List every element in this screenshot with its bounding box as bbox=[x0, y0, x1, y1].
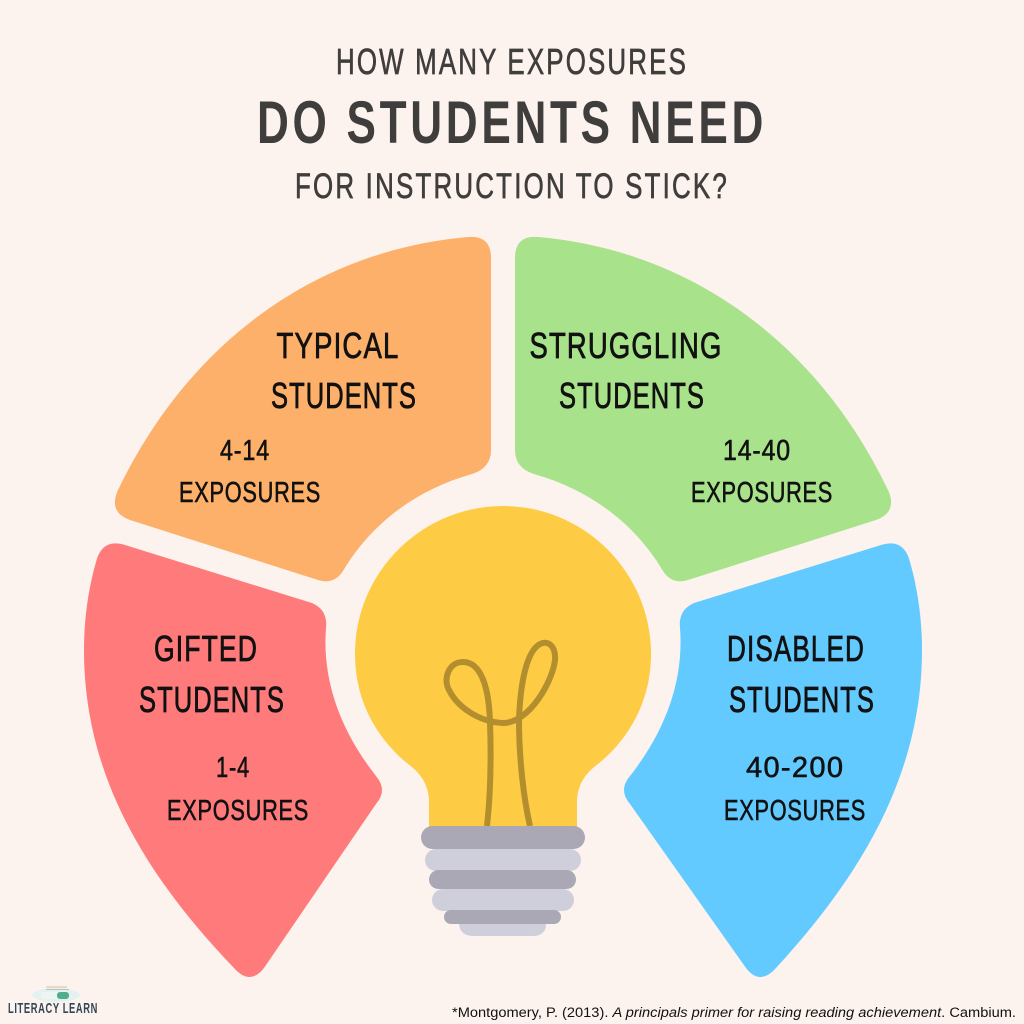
filament bbox=[447, 643, 555, 826]
text: gifted exposures: 1-4 bbox=[216, 752, 250, 784]
text: gifted exposures bbox=[167, 752, 309, 827]
text: disabled exposures: 40-200 bbox=[746, 752, 844, 784]
bulb base bbox=[421, 826, 585, 936]
panel: disabled students bbox=[624, 543, 922, 977]
heading: struggling students: STUDENTS bbox=[559, 375, 705, 416]
heading: gifted students: GIFTED bbox=[154, 628, 258, 669]
text: gifted exposures: EXPOSURES bbox=[167, 795, 309, 827]
panel: gifted students bbox=[84, 543, 382, 977]
text: struggling exposures bbox=[691, 435, 833, 509]
heading: disabled students: STUDENTS bbox=[729, 679, 875, 720]
text: disabled exposures bbox=[724, 752, 866, 827]
text: typical exposures bbox=[179, 435, 321, 509]
heading: typical students bbox=[271, 325, 417, 416]
heading: disabled students bbox=[727, 628, 875, 720]
text: typical exposures: EXPOSURES bbox=[179, 477, 321, 509]
text: struggling exposures: 14-40 bbox=[723, 435, 791, 467]
heading: gifted students bbox=[139, 628, 285, 720]
title: DO STUDENTS NEED bbox=[257, 89, 767, 156]
citation: *Montgomery, P. (2013). A principals primer for raising reading achievement . Cambium. bbox=[452, 1005, 1016, 1020]
panel: struggling students bbox=[515, 237, 891, 581]
text: struggling exposures: EXPOSURES bbox=[691, 477, 833, 509]
panel: typical students bbox=[115, 237, 491, 581]
text: disabled exposures: EXPOSURES bbox=[724, 795, 866, 827]
bulb glass bbox=[355, 506, 651, 828]
text: typical exposures: 4-14 bbox=[220, 435, 270, 467]
heading: disabled students: DISABLED bbox=[727, 628, 865, 669]
title: FOR INSTRUCTION TO STICK? bbox=[295, 167, 729, 206]
heading: typical students: STUDENTS bbox=[271, 375, 417, 416]
icon: light bulb bbox=[355, 506, 651, 936]
logo: literacy learn bbox=[8, 987, 98, 1017]
title bbox=[257, 41, 767, 206]
heading: gifted students: STUDENTS bbox=[139, 679, 285, 720]
heading: typical students: TYPICAL bbox=[276, 325, 400, 366]
heading: struggling students: STRUGGLING bbox=[530, 325, 722, 366]
logo: literacy learn: LITERACY LEARN bbox=[8, 1000, 98, 1017]
heading: struggling students bbox=[530, 325, 722, 416]
title: HOW MANY EXPOSURES bbox=[336, 41, 688, 82]
icon: book logo bbox=[32, 987, 80, 1002]
